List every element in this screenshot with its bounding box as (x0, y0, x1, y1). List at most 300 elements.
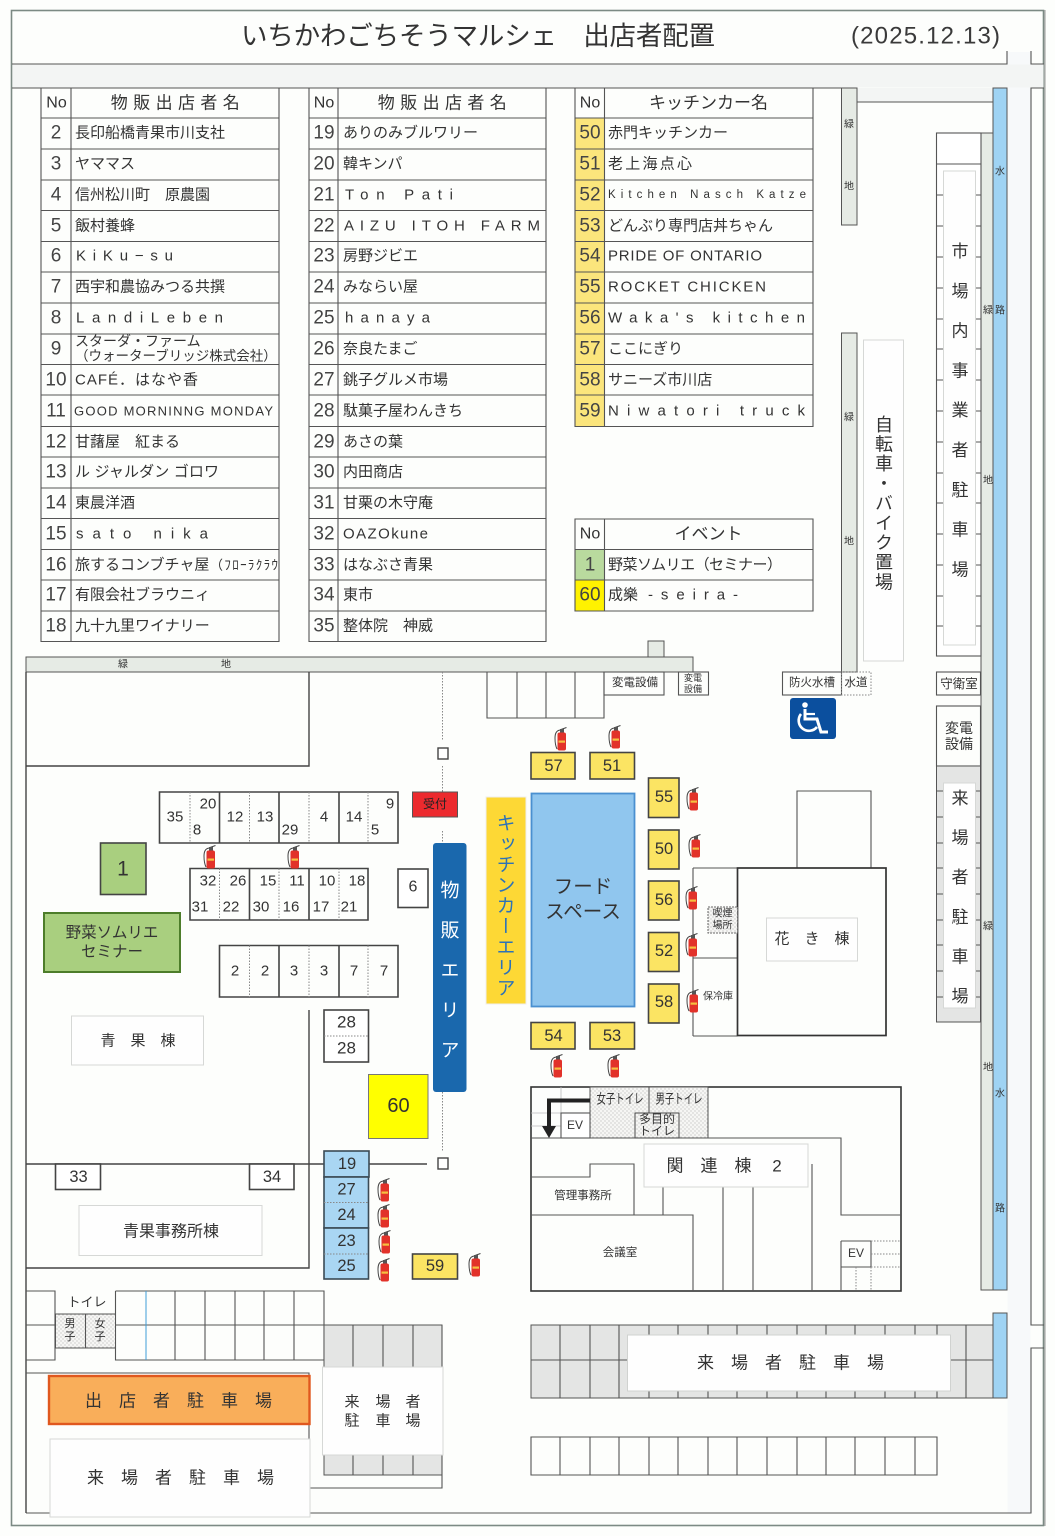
row 26: 奈良たまご (343, 340, 418, 358)
row 28: 駄菓子屋わんきち (343, 402, 463, 420)
parking: visitors east: 来場者駐車場 (948, 789, 968, 1027)
kitchen 54 (531, 1022, 575, 1049)
row 31: 31 (313, 492, 335, 514)
kitchen 59 (412, 1254, 458, 1279)
row 11: GOOD MORNINNG MONDAY (74, 404, 273, 418)
row 50 (579, 122, 728, 144)
kitchen 54: 54 (544, 1027, 563, 1045)
row 56: 56 (579, 308, 601, 328)
food space (532, 794, 634, 1006)
row 8: LandiLeben (76, 310, 223, 326)
kitchen 57 (531, 752, 575, 779)
row 16: 16 (45, 554, 67, 576)
header (580, 524, 742, 544)
row 51: 51 (579, 154, 601, 174)
row 17 (45, 584, 210, 606)
toilets block: 女子トイレ (596, 1092, 644, 1106)
row 35 (313, 616, 433, 636)
row 34: 東市 (343, 586, 373, 604)
row 57: ここにぎり (608, 340, 683, 358)
row 60: 成樂 (608, 586, 638, 604)
row 51: 老上海点心 (608, 156, 692, 172)
kitchen 55: 55 (655, 788, 673, 806)
row 25: 25 (313, 308, 335, 328)
row 31 (313, 492, 433, 514)
row 28: 28 (313, 400, 335, 422)
south west boundary (26, 1373, 309, 1440)
row 29 (313, 432, 403, 452)
elevator 1 (561, 1113, 590, 1138)
row 11: 11 (46, 400, 66, 422)
water supply: 水道 (844, 675, 868, 689)
kitchen 58: 58 (655, 993, 673, 1011)
green strip: middle: 地 (844, 534, 854, 548)
kitchen 51: 51 (603, 757, 621, 775)
transformer east (936, 706, 980, 766)
stalls row 1: 13 (257, 808, 273, 826)
building label: 関 (666, 1156, 684, 1176)
row 35: 整体院 神威 (343, 618, 433, 634)
row 13: 13 (45, 462, 67, 482)
goods area: 物販エリア (438, 880, 459, 1080)
accessible toilet: トイレ (639, 1124, 675, 1138)
transformer 2: 変電 (684, 672, 702, 683)
kitchen 50 (648, 830, 679, 869)
stall 33 (56, 1164, 100, 1190)
row 19: ありのみブルワリー (343, 124, 478, 142)
toilet label: トイレ (67, 1294, 107, 1310)
row 32 (313, 524, 428, 544)
row 35: 35 (313, 616, 335, 636)
visitor parking label: centre: 駐 (344, 1412, 360, 1430)
road: right side (1008, 52, 1030, 1513)
stall 6 (398, 869, 428, 908)
produce building label (72, 1016, 204, 1065)
event 60 (368, 1074, 428, 1138)
header (314, 94, 512, 112)
row 33 (313, 554, 433, 576)
stalls row 2: 15 (260, 872, 276, 890)
transformer east: 変電 (945, 720, 973, 736)
row 28 (313, 400, 463, 422)
row 34: 34 (313, 584, 335, 606)
stalls row 1: 9 (386, 796, 394, 812)
row 32: 32 (313, 524, 335, 544)
vegetable sommelier seminar (44, 913, 180, 972)
row 24: みならい屋 (343, 278, 418, 296)
stall 19 (324, 1151, 369, 1177)
visitor parking label: centre (322, 1367, 443, 1455)
waterway: lower (993, 1313, 1007, 1398)
waterway: upper: 路 (995, 304, 1005, 316)
header (46, 94, 245, 112)
stall 34: 34 (263, 1168, 281, 1186)
green strip: east side: 緑 (983, 920, 993, 932)
stall 33: 33 (69, 1168, 88, 1186)
table: kitchen cars 50-59 (575, 88, 813, 426)
row 55: ROCKET CHICKEN (608, 278, 766, 296)
stalls row 1: 14 (346, 808, 362, 826)
row 7 (51, 276, 225, 298)
transformer 2 (678, 672, 708, 695)
stalls 23 and 25 (324, 1228, 368, 1279)
header (580, 94, 768, 112)
stalls 23 and 25: 23 (337, 1232, 356, 1250)
building label: 棟 (734, 1156, 752, 1176)
vendor parking (49, 1376, 310, 1424)
stall 1: green (100, 843, 146, 894)
stalls row 2: 31 (192, 898, 208, 916)
elevator 2: EV (848, 1246, 864, 1260)
toilets (56, 1314, 116, 1348)
stalls row 1: 4 (320, 808, 328, 826)
row 3: ヤママス (75, 156, 135, 172)
kitchen 53: 53 (603, 1027, 621, 1045)
row 53: どんぶり専門店丼ちゃん (608, 218, 773, 234)
row 6: 6 (51, 246, 61, 266)
header: No (314, 94, 334, 112)
toilets: 女 (94, 1317, 106, 1330)
visitor parking east: 来場者駐車場 (697, 1354, 901, 1372)
row 2 (51, 122, 225, 144)
stalls row 2: 21 (341, 898, 357, 916)
visitor parking label: centre: 車 (375, 1412, 391, 1430)
row 6 (51, 246, 173, 266)
parking: market businesses: 市場内事業者駐車場 (948, 242, 968, 600)
flower building: き (804, 930, 820, 948)
kitchen 50: 50 (655, 840, 673, 858)
row 25: hanaya (345, 310, 431, 326)
kitchen car area: キッチンカーエリア (494, 813, 514, 998)
row 5 (51, 216, 135, 236)
row 6: KiKu−su (76, 248, 173, 264)
parking grid with toilets: southwest (26, 1291, 442, 1360)
kitchen 51 (590, 752, 634, 779)
row 57 (579, 338, 683, 360)
visitor parking label: centre: 者 (405, 1394, 421, 1410)
stall 28 (324, 1010, 368, 1062)
stalls row 1: 12 (227, 808, 243, 826)
row 9: （ウォーターブリッジ株式会社） (75, 348, 277, 364)
row 57: 57 (579, 338, 601, 360)
header: 物販出店者名 (111, 94, 245, 112)
row 10 (45, 370, 198, 390)
marker top (438, 748, 448, 759)
row 60: -seira- (648, 586, 738, 604)
produce building label: 棟 (160, 1032, 176, 1050)
green strip: north: 緑 (118, 658, 128, 670)
row 22: 22 (313, 216, 335, 236)
row 25 (313, 308, 431, 328)
row 12: 12 (45, 432, 67, 452)
row 10: CAFÉ．はなや香 (75, 372, 198, 388)
parking row south (531, 1437, 937, 1475)
stalls row 2: 30 (253, 898, 269, 916)
row 14 (45, 492, 135, 514)
building label: 2 (772, 1156, 782, 1176)
stalls row 1: 20 (200, 796, 216, 812)
transformer 1 (604, 672, 664, 695)
row 56: Waka's kitchen (608, 310, 805, 326)
stalls row 1: 35 (167, 808, 183, 826)
visitor parking label: centre: 来 (344, 1394, 360, 1410)
row 9: 9 (51, 338, 61, 360)
stall 1: green: 1 (117, 858, 129, 880)
row 21: 21 (313, 184, 335, 206)
title: いちかわごちそうマルシェ 出店者配置 (241, 21, 715, 51)
toilets block: 男子トイレ (656, 1092, 702, 1106)
row 60: 60 (579, 584, 601, 606)
vegetable sommelier seminar: セミナー (81, 944, 143, 960)
stalls row 1: 5 (371, 822, 379, 838)
row 13: ル ジャルダン ゴロワ (75, 462, 219, 480)
row 20: 韓キンパ (343, 156, 403, 172)
row 14: 東晨洋酒 (75, 494, 135, 512)
transformer 2: 設備 (684, 683, 702, 694)
waterway: upper: 路 (995, 1202, 1005, 1214)
row 24 (313, 276, 418, 298)
toilets block (590, 1087, 708, 1138)
food space: フード (554, 876, 612, 898)
dashed guide lines (442, 672, 444, 1152)
row 4 (51, 184, 210, 206)
stalls row 2: 22 (223, 898, 239, 916)
kitchen 53 (590, 1022, 634, 1049)
green strip: top right (842, 88, 857, 225)
row 51 (579, 154, 692, 174)
row 32: OAZOkune (343, 526, 428, 542)
related building 2 (531, 1087, 901, 1291)
header: No (580, 94, 600, 112)
row 27: 27 (313, 370, 335, 390)
stalls row 2 (190, 868, 368, 920)
toilets: 男 (64, 1318, 76, 1330)
stalls row 3: 7 (350, 962, 358, 980)
toilets: 子 (94, 1330, 106, 1343)
green strip: east side: 地 (983, 1060, 993, 1074)
bicycle parking (864, 340, 904, 661)
parking: market businesses (936, 133, 981, 656)
row 26 (313, 338, 418, 360)
waterway: upper: 水 (995, 166, 1005, 178)
stalls 27 and 24: 27 (337, 1180, 356, 1198)
visitor parking label: southwest: 来場者駐車場 (87, 1468, 291, 1488)
stalls row 2: 11 (289, 872, 305, 890)
row 9: スターダ・ファーム (75, 333, 201, 349)
row 18: 18 (45, 616, 67, 636)
gray parking south (310, 1325, 442, 1488)
date: (2025.12.13) (851, 22, 1000, 50)
stall 34 (250, 1164, 294, 1190)
stall 28: 28 (337, 1012, 356, 1032)
green strip: east side: 緑 (983, 304, 993, 316)
transformer east: 設備 (945, 736, 973, 752)
row 2: 2 (51, 122, 61, 144)
row 16 (45, 554, 278, 576)
row 5: 5 (51, 216, 61, 236)
green strip: north (26, 641, 693, 672)
row 23 (313, 246, 418, 266)
row 30: 内田商店 (343, 464, 403, 480)
vendor parking: 出店者駐車場 (85, 1392, 289, 1410)
marker bottom (438, 1158, 448, 1169)
header: 物販出店者名 (378, 94, 512, 112)
water supply (842, 672, 871, 695)
kitchen 56: 56 (655, 891, 673, 909)
row 24: 24 (313, 276, 335, 298)
table: events (575, 519, 813, 611)
green strip: east side (981, 133, 993, 1290)
row 3 (51, 154, 135, 174)
kitchen car area (486, 797, 526, 1004)
reception: 受付 (423, 797, 447, 811)
stall 6: 6 (409, 878, 418, 896)
site lines (26, 672, 427, 1513)
row 23: 23 (313, 246, 335, 266)
row 5: 飯村養蜂 (75, 218, 135, 234)
row 13 (45, 462, 219, 482)
smoking area: 場所 (712, 918, 732, 932)
row 29: あさの葉 (343, 434, 403, 450)
row 50: 50 (579, 122, 601, 144)
meeting room: 会議室 (603, 1245, 637, 1259)
row 27 (313, 370, 448, 390)
kitchen 57: 57 (544, 757, 563, 775)
green strip: top right: 緑 (844, 118, 854, 130)
row 8: 8 (51, 308, 61, 328)
row 55: 55 (579, 276, 601, 298)
stalls row 2: 17 (313, 898, 329, 916)
vegetable sommelier seminar: 野菜ソムリエ (66, 924, 158, 942)
row 55 (579, 276, 766, 298)
stall 19: 19 (338, 1155, 356, 1173)
row 31: 甘栗の木守庵 (343, 494, 433, 512)
waterway: upper (993, 88, 1007, 1290)
kitchen 52: 52 (655, 942, 673, 960)
row 54: 54 (579, 246, 601, 266)
green strip: north: 地 (221, 658, 231, 670)
row 30 (313, 462, 403, 482)
row 15: sato nika (76, 526, 209, 542)
row 52: 52 (579, 184, 601, 206)
row 18: 九十九里ワイナリー (75, 618, 210, 634)
flower building (693, 791, 886, 1036)
row 52: Kitchen Nasch Katze (608, 189, 806, 201)
building label: 連 (700, 1156, 718, 1176)
row 23: 房野ジビエ (343, 248, 418, 264)
stalls 23 and 25: 25 (337, 1257, 356, 1275)
row 17: 17 (45, 584, 67, 606)
row 58: 58 (579, 370, 601, 390)
header: キッチンカー名 (649, 94, 768, 112)
row 3: 3 (51, 154, 61, 174)
row 16: 旅するコンブチャ屋 (75, 556, 209, 574)
row 58 (579, 370, 712, 390)
stalls 27 and 24 (324, 1177, 368, 1228)
visitor parking label: centre: 場 (375, 1394, 391, 1410)
stalls row 1: 29 (282, 822, 298, 838)
produce building label: 果 (130, 1032, 146, 1050)
row 33: 33 (313, 554, 335, 576)
row 15 (45, 524, 209, 544)
header: イベント (674, 524, 742, 544)
row 14: 14 (45, 492, 67, 514)
stalls row 1 (160, 792, 398, 843)
flower building: 花 (774, 930, 790, 948)
bicycle parking: 自転車・バイク置場 (873, 415, 893, 592)
row 1: 野菜ソムリエ（セミナー） (608, 556, 782, 574)
stalls row 2: 26 (230, 872, 246, 890)
toilets: 子 (64, 1330, 76, 1343)
row 20 (313, 154, 403, 174)
row 18 (45, 616, 210, 636)
accessible toilet (635, 1111, 679, 1138)
smoking area (708, 907, 738, 933)
produce office label (79, 1206, 262, 1256)
stalls row 3: 3 (290, 962, 298, 980)
row 19: 19 (313, 122, 335, 144)
row 12 (45, 432, 180, 452)
row 27: 銚子グルメ市場 (343, 372, 448, 388)
visitor parking label: centre: 場 (405, 1412, 421, 1430)
row 29: 29 (313, 432, 335, 452)
kitchen 52 (648, 932, 679, 972)
waterway: upper: 水 (995, 1088, 1005, 1100)
stalls row 2: 32 (200, 872, 216, 890)
stalls 27 and 24: 24 (337, 1206, 356, 1224)
row 20: 20 (313, 154, 335, 174)
stalls row 1: 8 (193, 822, 201, 838)
produce building label: 青 (100, 1032, 116, 1050)
elevator 1: EV (567, 1118, 583, 1132)
kitchen 59: 59 (426, 1257, 444, 1275)
stalls row 3 (220, 946, 398, 997)
icon: wheelchair (790, 698, 836, 739)
row 7: 西宇和農協みつる共撰 (75, 278, 225, 296)
stalls row 3: 7 (380, 962, 388, 980)
reception (412, 792, 458, 817)
food space: スペース (545, 901, 621, 923)
header: No (46, 94, 67, 112)
office: 管理事務所 (554, 1188, 612, 1202)
fire water tank (782, 672, 842, 695)
row 59: Niwatori truck (608, 402, 806, 420)
row 2: 長印船橋青果市川支社 (75, 124, 225, 142)
goods area (433, 843, 466, 1092)
kitchen 58 (648, 984, 679, 1023)
row 21 (313, 184, 453, 206)
parking: visitors east (936, 766, 981, 1027)
table: goods vendors 2-18 (41, 88, 279, 642)
row 17: 有限会社ブラウニィ (75, 586, 210, 604)
event 60: 60 (387, 1095, 410, 1117)
row 10: 10 (45, 370, 67, 390)
green strip: middle (842, 333, 857, 672)
row 8 (51, 308, 223, 328)
row 59: 59 (579, 400, 601, 422)
row 60 (579, 584, 738, 606)
stalls row 2: 18 (349, 872, 365, 890)
row 26: 26 (313, 338, 335, 360)
row 34 (313, 584, 373, 606)
stalls row 2: 10 (319, 872, 335, 890)
row 52 (579, 184, 806, 206)
icons: fire extinguishers (204, 726, 700, 1282)
row 4: 4 (51, 184, 62, 206)
visitor parking east (531, 1325, 993, 1398)
parking stub north (487, 672, 604, 718)
green strip: east side: 地 (983, 474, 993, 486)
